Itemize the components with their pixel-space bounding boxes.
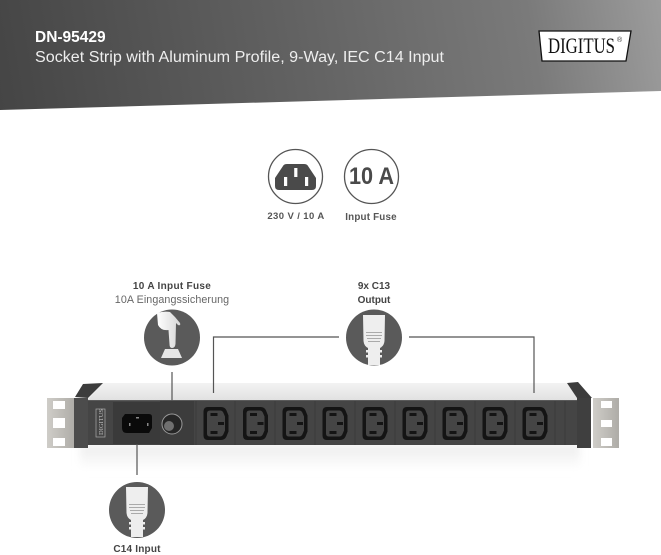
label: C14 Input: C14 Input (113, 544, 161, 555)
icon: C14 plug (109, 482, 165, 538)
left end cap (74, 398, 88, 448)
arrow: connector line to C14 inlet (136, 444, 138, 475)
front panel (88, 400, 578, 445)
left mounting bracket (47, 398, 75, 448)
arrow: connector line to fuse (171, 372, 173, 401)
DIGITUS logo: ® (617, 36, 623, 44)
label: 10A Input Fuse (115, 281, 229, 306)
product title: Socket Strip with Aluminum Profile, 9-Way, IEC C14 Input (35, 49, 445, 66)
C13 socket 2 (243, 407, 268, 440)
label: 9x C13 Output: 9x C13 (358, 281, 391, 292)
icon: 10 A fuse: 10 A (349, 163, 394, 190)
socket strip (47, 382, 619, 448)
right mounting bracket (593, 398, 619, 448)
panel logo: DIGITUS (98, 409, 105, 435)
C13 socket 4 (322, 407, 348, 440)
label: 9x C13 Output: Output (358, 295, 391, 306)
floor shadow (80, 445, 580, 469)
header banner (0, 0, 661, 110)
C13 socket 1 (204, 407, 228, 440)
right top ear (567, 382, 592, 398)
icon: finger pressing fuse (144, 310, 200, 366)
label: 10A Input Fuse: 10 A Input Fuse (133, 281, 211, 292)
C13 socket 8 (482, 407, 508, 440)
label: 10A Input Fuse: 10A Eingangssicherung (115, 294, 229, 306)
label: Input Fuse: Input Fuse (345, 212, 397, 223)
icon: C13 plug (346, 310, 402, 366)
C13 socket 3 (282, 407, 308, 440)
label: 230V / 10A: 230 V / 10 A (267, 211, 325, 222)
C13 socket 7 (442, 407, 468, 440)
product number: DN-95429 (35, 29, 106, 46)
label: 9x C13 Output (358, 281, 391, 306)
right end cap (577, 398, 591, 448)
arrow: connector line to C13 outputs (214, 337, 534, 393)
left top ear (75, 383, 103, 398)
fuse holder (162, 414, 182, 434)
DIGITUS logo: DIGITUS (548, 33, 615, 58)
C13 socket 6 (402, 407, 428, 440)
C13 socket 9 (522, 407, 548, 440)
C14 inlet (113, 402, 160, 444)
aluminum top (87, 383, 578, 400)
C13 socket 5 (362, 407, 388, 440)
icon: C14 230V socket (268, 150, 322, 204)
icon: 10 A fuse (344, 150, 398, 204)
